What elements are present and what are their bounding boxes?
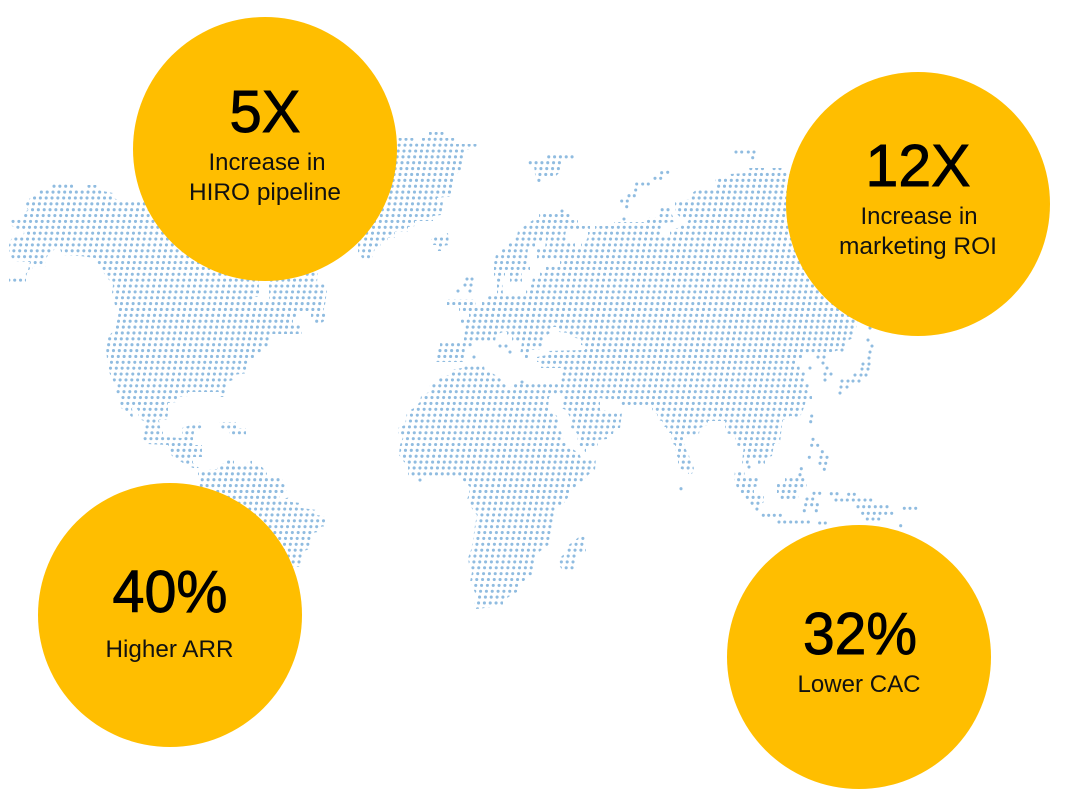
metric circle: 5X <box>133 17 397 281</box>
map: North America <box>9 184 327 468</box>
metric circle: 32%: 32% <box>803 601 917 667</box>
metric circle: 32% <box>727 525 991 789</box>
map: Borneo <box>777 478 807 501</box>
map: dot lattice clipped to land <box>9 132 858 609</box>
map: Madagascar <box>559 536 586 571</box>
metric circle: 40%: Higher ARR <box>106 636 234 663</box>
map: Eurasia <box>459 168 900 474</box>
metric circle: 5X: HIRO pipeline <box>189 179 341 206</box>
metric circle: 12X <box>786 72 1050 336</box>
map: South America <box>198 459 327 567</box>
map: Iberia <box>436 341 473 362</box>
metric circle: 5X: 5X <box>230 79 300 145</box>
metric circle: 32%: Lower CAC <box>798 671 920 698</box>
metric circle: 12X: marketing ROI <box>839 233 997 260</box>
metric circle: 40% <box>38 483 302 747</box>
map: Scandinavia <box>494 214 590 295</box>
metric circle: 5X: Increase in <box>208 149 326 176</box>
metric circle: 40%: 40% <box>112 559 228 625</box>
map: Africa <box>398 364 596 609</box>
map: isolated island dots <box>420 152 916 526</box>
metric circle: 12X: 12X <box>866 133 970 199</box>
map: Greenland <box>358 132 477 260</box>
metric circle: 12X: Increase in <box>860 203 978 230</box>
map: Svalbard <box>527 154 575 183</box>
dotted world map <box>0 132 950 609</box>
